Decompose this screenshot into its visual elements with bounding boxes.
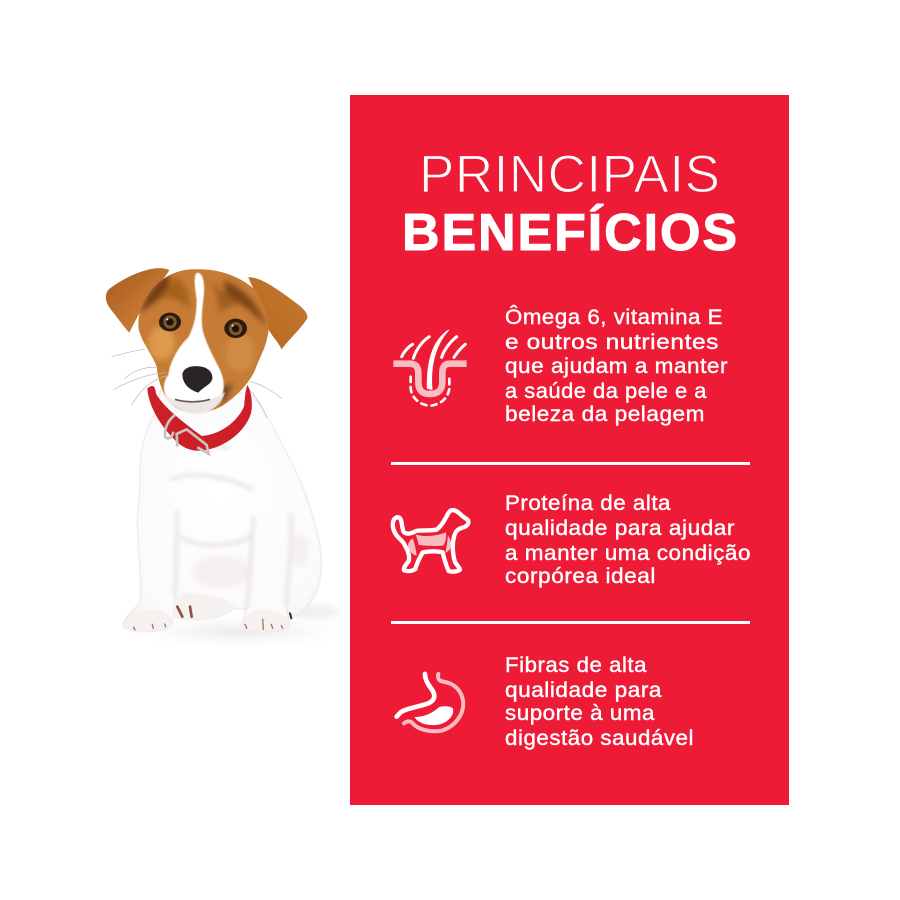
haunch tint bbox=[292, 533, 308, 567]
text: digestion: qualidade para bbox=[505, 679, 662, 702]
panel: benefits bbox=[350, 95, 789, 805]
heading: PRINCIPAIS bbox=[419, 145, 720, 204]
white face blaze bbox=[164, 273, 224, 411]
nose bbox=[182, 366, 212, 393]
text: body condition: qualidade para ajudar bbox=[505, 517, 735, 540]
paws bbox=[123, 595, 289, 632]
text: digestion: Fibras de alta bbox=[505, 654, 647, 677]
text: skin and coat: que ajudam a manter bbox=[505, 355, 728, 378]
text: skin and coat: e outros nutrientes bbox=[505, 331, 719, 354]
paw details bbox=[134, 607, 291, 630]
right side floor shadow bbox=[287, 604, 340, 619]
icon: stomach bbox=[397, 674, 463, 731]
text: body condition: Proteína de alta bbox=[505, 492, 671, 515]
text: body condition bbox=[505, 492, 751, 588]
icon: skin and coat bbox=[393, 330, 467, 406]
text: skin and coat: Ômega 6, vitamina E bbox=[505, 306, 723, 329]
mouth bbox=[175, 399, 210, 402]
dog shaded muscle areas bbox=[408, 532, 451, 556]
text: skin and coat: a saúde da pele e a bbox=[505, 380, 707, 403]
heading: BENEFÍCIOS bbox=[402, 204, 737, 262]
text: skin and coat: beleza da pelagem bbox=[505, 403, 705, 426]
divider bbox=[391, 621, 750, 624]
text: digestion bbox=[505, 654, 694, 750]
text: body condition: a manter uma condição bbox=[505, 542, 751, 565]
text: digestion: digestão saudável bbox=[505, 727, 694, 750]
heading bbox=[402, 145, 737, 262]
whiskers bbox=[112, 349, 282, 418]
text: skin and coat bbox=[505, 306, 728, 426]
puppy body bbox=[123, 390, 321, 632]
collar buckle bbox=[165, 415, 209, 454]
collar bbox=[147, 385, 252, 451]
muzzle shading bbox=[162, 392, 225, 414]
right eye bbox=[224, 319, 247, 338]
panel background bbox=[350, 95, 789, 805]
right ear bbox=[248, 277, 307, 349]
dark fur patches bbox=[140, 273, 267, 403]
left ear bbox=[106, 268, 169, 333]
belly tint bbox=[192, 555, 252, 588]
head bbox=[138, 269, 268, 412]
text: digestion: suporte à uma bbox=[505, 702, 655, 725]
dog outline bbox=[393, 510, 468, 572]
photo: puppy with red collar bbox=[106, 268, 338, 640]
divider bbox=[391, 462, 750, 465]
text: body condition: corpórea ideal bbox=[505, 565, 656, 588]
ground shadow bbox=[123, 615, 357, 648]
head base fur bbox=[138, 269, 268, 412]
chest and leg shading bbox=[167, 420, 292, 608]
icon: dog body condition bbox=[393, 510, 468, 572]
left eye bbox=[159, 313, 181, 331]
